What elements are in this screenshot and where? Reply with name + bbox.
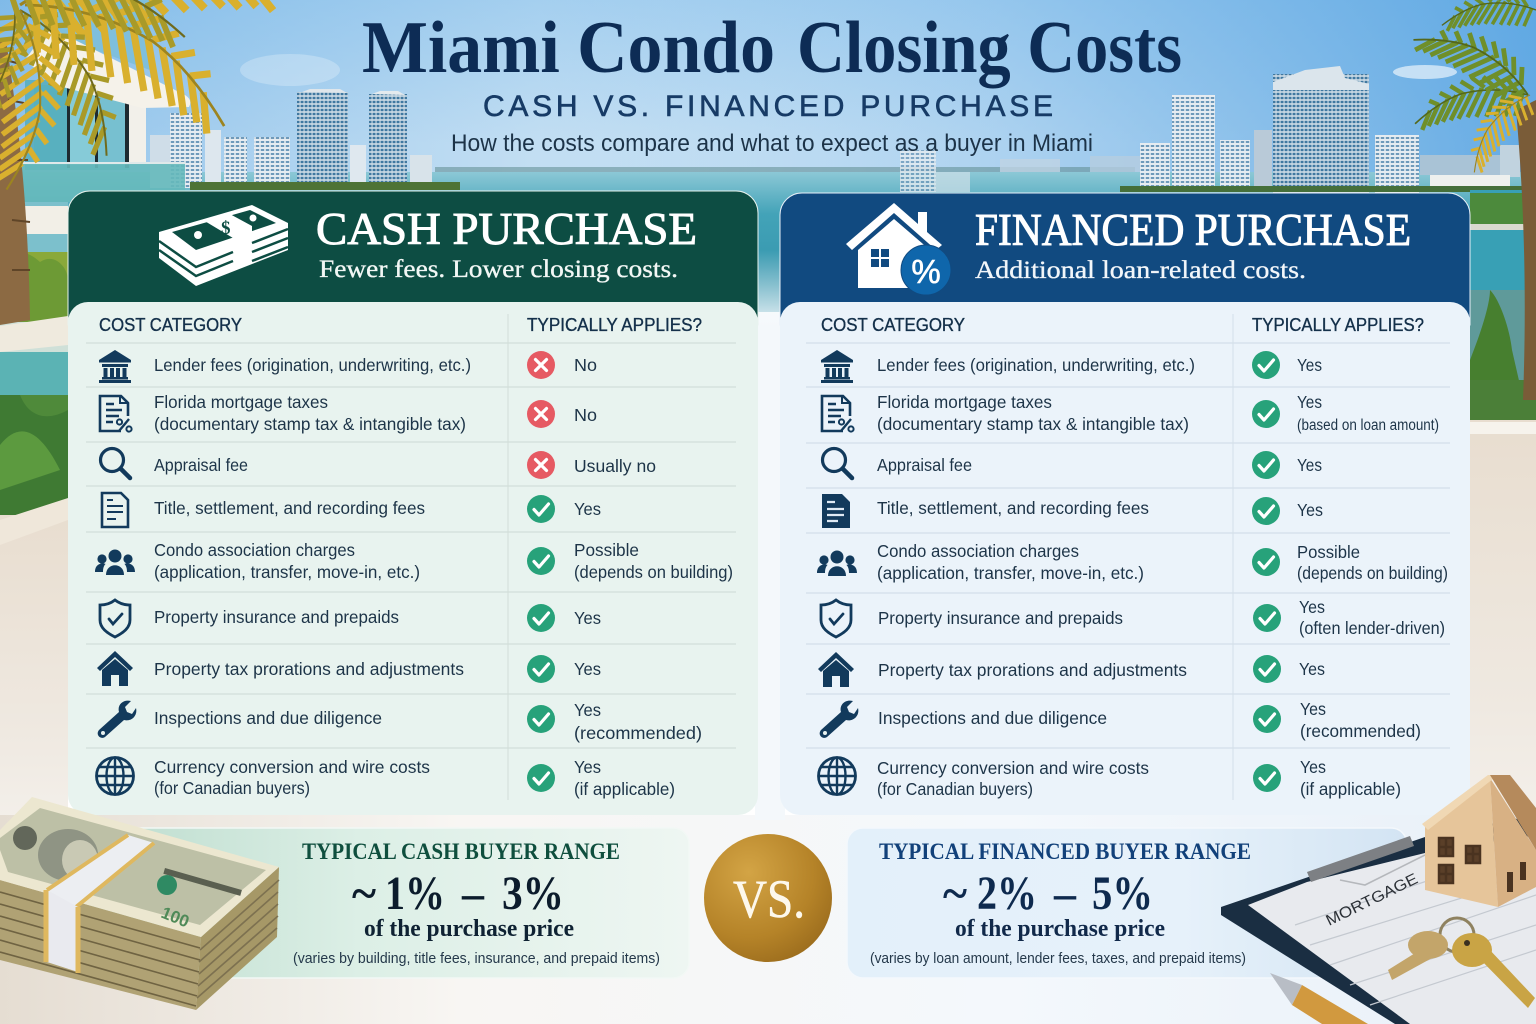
row: title fees bbox=[822, 494, 1323, 528]
financed tagline: Additional loan-related costs. bbox=[975, 257, 1306, 284]
row: lender fees: Yes bbox=[1297, 355, 1322, 375]
row: lender fees: No bbox=[574, 355, 597, 375]
left shrubs bbox=[0, 395, 68, 545]
row: property insurance: Yes bbox=[574, 608, 601, 628]
left modern building bbox=[0, 0, 190, 252]
row: appraisal fee: Yes bbox=[1297, 455, 1322, 475]
callout: typical financed buyer range: of the purchase price bbox=[955, 916, 1165, 942]
row: title fees: Title, settlement, and recording fees bbox=[877, 498, 1149, 518]
skyline: right towers bbox=[1120, 66, 1536, 194]
callout: typical cash buyer range: 3% bbox=[502, 867, 564, 920]
row: appraisal fee bbox=[822, 448, 1322, 479]
row: condo association: (application, transfer, move-in, etc.) bbox=[154, 562, 420, 582]
badge: VS bbox=[704, 834, 832, 962]
row: florida mortgage taxes: (based on loan amount) bbox=[1297, 417, 1439, 434]
skyline: left towers bbox=[150, 89, 460, 190]
row: inspections bbox=[820, 699, 1421, 741]
row: condo association: Condo association charges bbox=[877, 541, 1079, 561]
row: property tax: Property tax prorations and adjustments bbox=[154, 659, 464, 679]
tagline: How the costs compare and what to expect as a buyer in Miami bbox=[451, 130, 1093, 157]
cash tagline: Fewer fees. Lower closing costs. bbox=[319, 256, 678, 283]
callout: typical financed buyer range: ~ bbox=[943, 867, 967, 920]
row: inspections: Yes bbox=[1300, 699, 1326, 719]
cash header bbox=[68, 191, 758, 325]
skyline: distant shore and central towers bbox=[435, 150, 1140, 192]
cash column headings: TYPICALLY APPLIES? bbox=[527, 315, 702, 335]
row: florida mortgage taxes: (documentary stamp tax & intangible tax) bbox=[877, 414, 1189, 434]
row: condo association: Possible bbox=[574, 540, 639, 560]
row: property insurance bbox=[821, 597, 1445, 638]
row: currency bbox=[96, 757, 675, 799]
cash column headings bbox=[99, 315, 702, 335]
pen bbox=[1270, 973, 1368, 1024]
icon: stack of cash: $ bbox=[221, 218, 230, 239]
row: currency: Yes bbox=[1300, 757, 1326, 777]
row: inspections: Inspections and due diligence bbox=[154, 708, 382, 728]
small wooden house bbox=[1422, 775, 1536, 907]
row: florida mortgage taxes: Florida mortgage taxes bbox=[154, 392, 328, 412]
row: appraisal fee: Usually no bbox=[574, 456, 656, 476]
row: title fees: Yes bbox=[574, 499, 601, 519]
row: appraisal fee: Appraisal fee bbox=[154, 455, 248, 475]
row: currency: Currency conversion and wire costs bbox=[877, 758, 1149, 778]
row: property tax: Yes bbox=[574, 659, 601, 679]
row: florida mortgage taxes: Yes bbox=[1297, 392, 1322, 412]
row: currency: (if applicable) bbox=[574, 779, 675, 799]
financed column headings: TYPICALLY APPLIES? bbox=[1252, 315, 1424, 335]
row: property insurance: Property insurance and prepaids bbox=[154, 607, 399, 627]
callout: typical cash buyer range: 1% bbox=[385, 867, 445, 920]
row: inspections: (recommended) bbox=[1300, 721, 1421, 741]
row: condo association: (depends on building) bbox=[574, 562, 733, 582]
badge: VS: VS. bbox=[733, 869, 805, 929]
row: property tax: Property tax prorations and adjustments bbox=[878, 660, 1187, 680]
callout: typical financed buyer range: – bbox=[1053, 867, 1077, 920]
row: currency: (if applicable) bbox=[1300, 779, 1401, 799]
row: condo association: Possible bbox=[1297, 542, 1360, 562]
row: lender fees bbox=[821, 350, 1322, 383]
row: inspections: (recommended) bbox=[574, 723, 702, 743]
cash table bbox=[68, 302, 758, 815]
callout: typical financed buyer range: TYPICAL FINANCED BUYER RANGE bbox=[879, 839, 1251, 864]
row: property insurance: (often lender-driven) bbox=[1299, 618, 1445, 638]
callout: typical cash buyer range: ~ bbox=[352, 867, 376, 920]
background: sky and bay bbox=[0, 0, 1536, 312]
right side bay and shrubs bbox=[1470, 190, 1536, 420]
panel: financed purchase bbox=[780, 193, 1470, 815]
row: florida mortgage taxes: No bbox=[574, 405, 597, 425]
callout: typical cash buyer range bbox=[90, 828, 689, 978]
callout: typical cash buyer range: – bbox=[461, 867, 485, 920]
row: title fees bbox=[102, 493, 601, 527]
row: currency: (for Canadian buyers) bbox=[154, 778, 310, 798]
keys bbox=[1388, 918, 1535, 1008]
photo: mortgage clipboard, house and keys bbox=[1221, 775, 1536, 1024]
row: lender fees: Lender fees (origination, underwriting, etc.) bbox=[877, 355, 1195, 375]
photo: mortgage clipboard, house and keys: MORTGAGE bbox=[1323, 870, 1421, 930]
panel: cash purchase bbox=[68, 191, 758, 815]
row: property insurance: Property insurance and prepaids bbox=[878, 608, 1123, 628]
row: property insurance bbox=[100, 600, 601, 637]
icon: house with percent bbox=[846, 203, 951, 295]
row: title fees: Title, settlement, and recording fees bbox=[154, 498, 425, 518]
row: inspections: Yes bbox=[574, 700, 601, 720]
row: florida mortgage taxes bbox=[822, 392, 1439, 434]
row: appraisal fee: Appraisal fee bbox=[877, 455, 972, 475]
centre fade behind panels bbox=[68, 250, 1470, 330]
row: title fees: Yes bbox=[1297, 500, 1323, 520]
icon: stack of cash bbox=[159, 205, 288, 286]
photo: stack of hundred dollar bills bbox=[0, 797, 279, 1010]
callout: typical financed buyer range: 5% bbox=[1092, 867, 1153, 920]
row: currency bbox=[818, 757, 1401, 799]
financed heading: FINANCED PURCHASE bbox=[975, 205, 1411, 255]
row: property insurance: Yes bbox=[1299, 597, 1325, 617]
callout: typical cash buyer range: (varies by building, title fees, insurance, and prepaid items) bbox=[293, 950, 660, 967]
title: Closing Costs bbox=[797, 7, 1182, 89]
financed header bbox=[780, 193, 1470, 325]
callout: typical financed buyer range: (varies by loan amount, lender fees, taxes, and prepaid items) bbox=[870, 950, 1246, 967]
row: appraisal fee bbox=[100, 448, 656, 479]
row: currency: (for Canadian buyers) bbox=[877, 779, 1033, 799]
financed column headings: COST CATEGORY bbox=[821, 315, 965, 335]
callout: typical financed buyer range bbox=[847, 828, 1407, 978]
financed table bbox=[780, 302, 1470, 815]
row: lender fees bbox=[99, 350, 597, 383]
row: property tax bbox=[97, 651, 601, 686]
row: condo association bbox=[95, 540, 733, 582]
row: condo association: Condo association charges bbox=[154, 540, 355, 560]
row: property tax: Yes bbox=[1299, 659, 1325, 679]
row: property tax bbox=[818, 652, 1325, 687]
row: inspections bbox=[98, 700, 702, 743]
left palm tree bbox=[0, 0, 289, 325]
title bbox=[362, 7, 1182, 89]
photo: stack of hundred dollar bills: 100 bbox=[159, 903, 192, 931]
subtitle: CASH VS. FINANCED PURCHASE bbox=[483, 90, 1053, 123]
callout: typical cash buyer range: TYPICAL CASH BUYER RANGE bbox=[302, 839, 620, 864]
callout: typical cash buyer range: of the purchase price bbox=[364, 916, 574, 942]
row: currency: Yes bbox=[574, 757, 601, 777]
row: condo association bbox=[817, 541, 1448, 583]
row: condo association: (application, transfer, move-in, etc.) bbox=[877, 563, 1144, 583]
row: condo association: (depends on building) bbox=[1297, 563, 1448, 583]
row: florida mortgage taxes: Florida mortgage taxes bbox=[877, 392, 1052, 412]
financed column headings bbox=[821, 315, 1424, 335]
row: lender fees: Lender fees (origination, underwriting, etc.) bbox=[154, 355, 471, 375]
row: florida mortgage taxes: (documentary stamp tax & intangible tax) bbox=[154, 414, 466, 434]
row: inspections: Inspections and due diligence bbox=[878, 708, 1107, 728]
row: currency: Currency conversion and wire costs bbox=[154, 757, 430, 777]
right palm tree bbox=[1409, 0, 1536, 400]
floor terrace bbox=[0, 252, 1536, 1024]
icon: house with percent: % bbox=[911, 253, 941, 290]
title: Miami Condo bbox=[362, 7, 775, 89]
row: florida mortgage taxes bbox=[100, 392, 597, 434]
cash heading: CASH PURCHASE bbox=[316, 204, 697, 254]
cash column headings: COST CATEGORY bbox=[99, 315, 242, 335]
callout: typical financed buyer range: 2% bbox=[977, 867, 1037, 920]
